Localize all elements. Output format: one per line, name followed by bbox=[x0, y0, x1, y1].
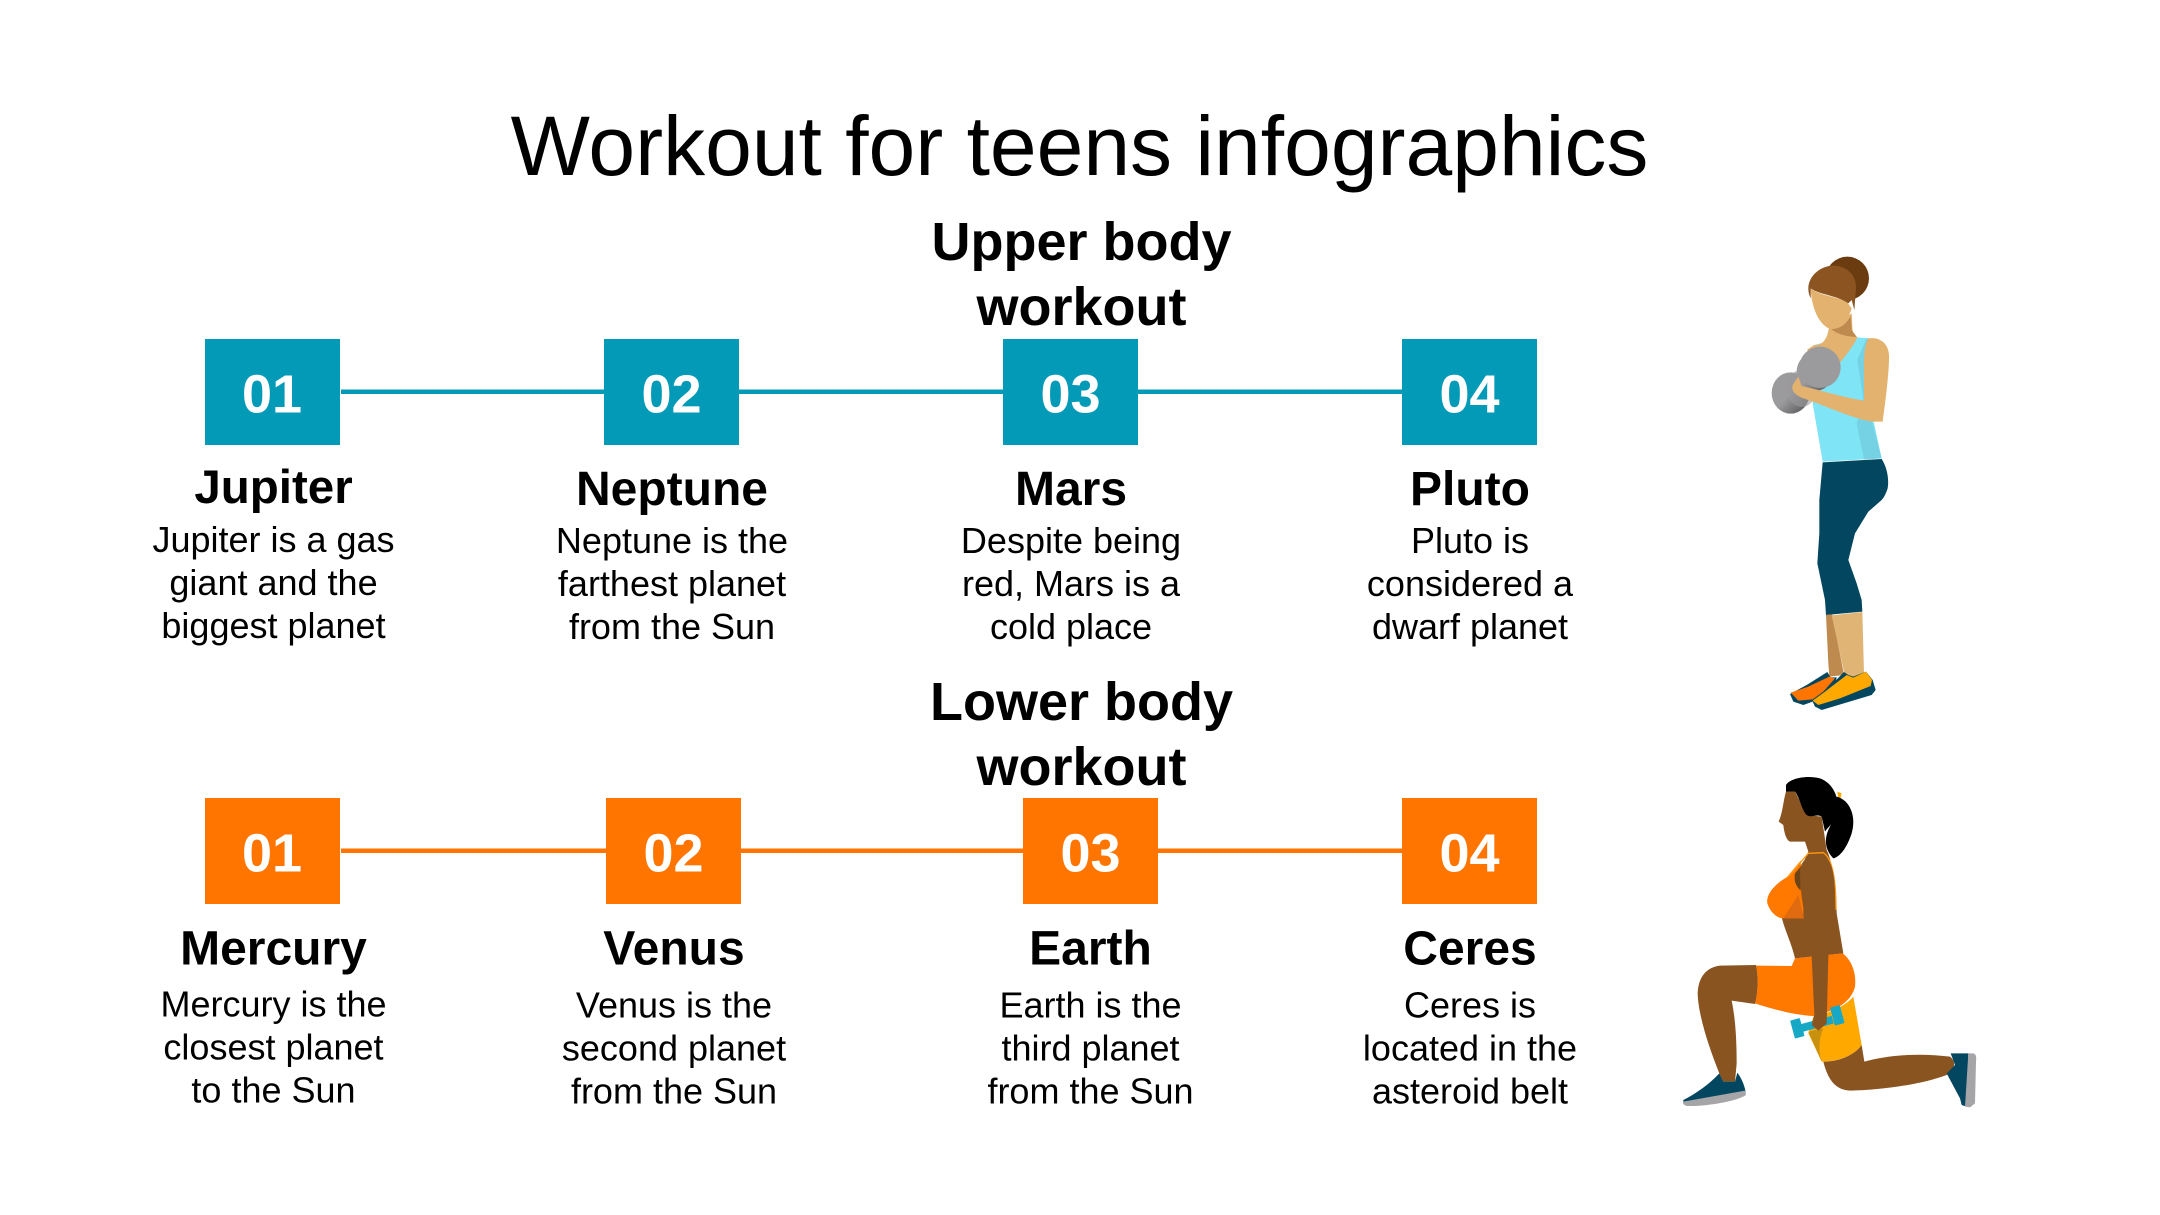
step 03 Earth: 03 bbox=[1060, 824, 1121, 884]
title: Workout for teens infographics bbox=[511, 99, 1648, 193]
timeline connector: upper bbox=[341, 390, 1402, 394]
step 01 Mercury bbox=[160, 798, 387, 1110]
step 02 Neptune bbox=[556, 339, 788, 647]
step 03 Earth: Earth bbox=[1029, 922, 1152, 976]
step 04 Ceres: Ceres is bbox=[1404, 984, 1536, 1026]
step 03 Mars: cold place bbox=[990, 606, 1152, 647]
step 01 Jupiter: giant and the bbox=[169, 562, 378, 603]
step 03 Earth: Earth is the bbox=[999, 984, 1182, 1026]
step 03 Mars: red, Mars is a bbox=[962, 563, 1181, 604]
step 01 Mercury: closest planet bbox=[163, 1026, 384, 1068]
step 02 Venus: Venus bbox=[603, 922, 745, 976]
step 01 Mercury: 01 bbox=[242, 824, 302, 884]
step 03 Earth: third planet bbox=[1001, 1028, 1180, 1068]
heading: upper body: Upper body bbox=[931, 212, 1232, 272]
step 04 Pluto: Pluto is bbox=[1411, 520, 1529, 561]
heading: lower body: workout bbox=[976, 737, 1187, 797]
step 01 Mercury: Mercury is the bbox=[160, 984, 387, 1024]
step 03 Mars: Despite being bbox=[961, 520, 1181, 561]
step 01 Jupiter: biggest planet bbox=[161, 605, 386, 646]
step 02 Neptune: Neptune is the bbox=[556, 520, 788, 561]
step 04 Ceres: 04 bbox=[1439, 824, 1500, 884]
step 04 Pluto: dwarf planet bbox=[1372, 606, 1568, 647]
step 02 Venus: from the Sun bbox=[571, 1070, 777, 1112]
step 03 Mars bbox=[961, 339, 1181, 647]
heading: upper body: workout bbox=[976, 277, 1187, 337]
step 02 Neptune: from the Sun bbox=[569, 606, 775, 647]
step 03 Mars: Mars bbox=[1015, 463, 1127, 516]
step 03 Earth: from the Sun bbox=[987, 1070, 1194, 1112]
timeline connector: lower bbox=[341, 848, 1402, 853]
step 01 Jupiter: 01 bbox=[242, 364, 302, 424]
heading: lower body: Lower body bbox=[930, 672, 1233, 732]
step 04 Ceres: Ceres bbox=[1403, 922, 1537, 976]
step 04 Ceres: asteroid belt bbox=[1372, 1070, 1568, 1112]
step 04 Ceres: located in the bbox=[1363, 1028, 1577, 1068]
step 01 Jupiter: Jupiter is a gas bbox=[152, 519, 395, 560]
step 02 Neptune: 02 bbox=[641, 364, 702, 424]
step 04 Pluto bbox=[1367, 339, 1574, 647]
step 02 Neptune: farthest planet bbox=[558, 563, 786, 604]
icon: woman lifting dumbbell bbox=[1772, 257, 1889, 710]
panel: upper body workout bbox=[152, 212, 1574, 647]
heading: upper body bbox=[931, 212, 1232, 337]
step 01 Mercury: to the Sun bbox=[191, 1070, 356, 1110]
step 01 Mercury: Mercury bbox=[180, 922, 367, 976]
step 02 Venus bbox=[562, 798, 786, 1112]
step 02 Venus: second planet bbox=[562, 1028, 786, 1068]
step 03 Mars: 03 bbox=[1040, 364, 1101, 424]
step 02 Venus: 02 bbox=[643, 824, 704, 884]
step 04 Pluto: considered a bbox=[1367, 563, 1574, 604]
step 01 Jupiter: Jupiter bbox=[194, 461, 353, 514]
icon: woman doing lunge bbox=[1683, 777, 1976, 1107]
step 04 Ceres bbox=[1363, 798, 1577, 1112]
step 03 Earth bbox=[987, 798, 1194, 1112]
panel: lower body workout bbox=[160, 672, 1577, 1112]
step 02 Neptune: Neptune bbox=[576, 463, 768, 516]
heading: lower body bbox=[930, 672, 1233, 797]
step 04 Pluto: 04 bbox=[1439, 364, 1500, 424]
step 02 Venus: Venus is the bbox=[576, 984, 772, 1026]
step 01 Jupiter bbox=[152, 339, 395, 646]
step 04 Pluto: Pluto bbox=[1410, 463, 1530, 516]
